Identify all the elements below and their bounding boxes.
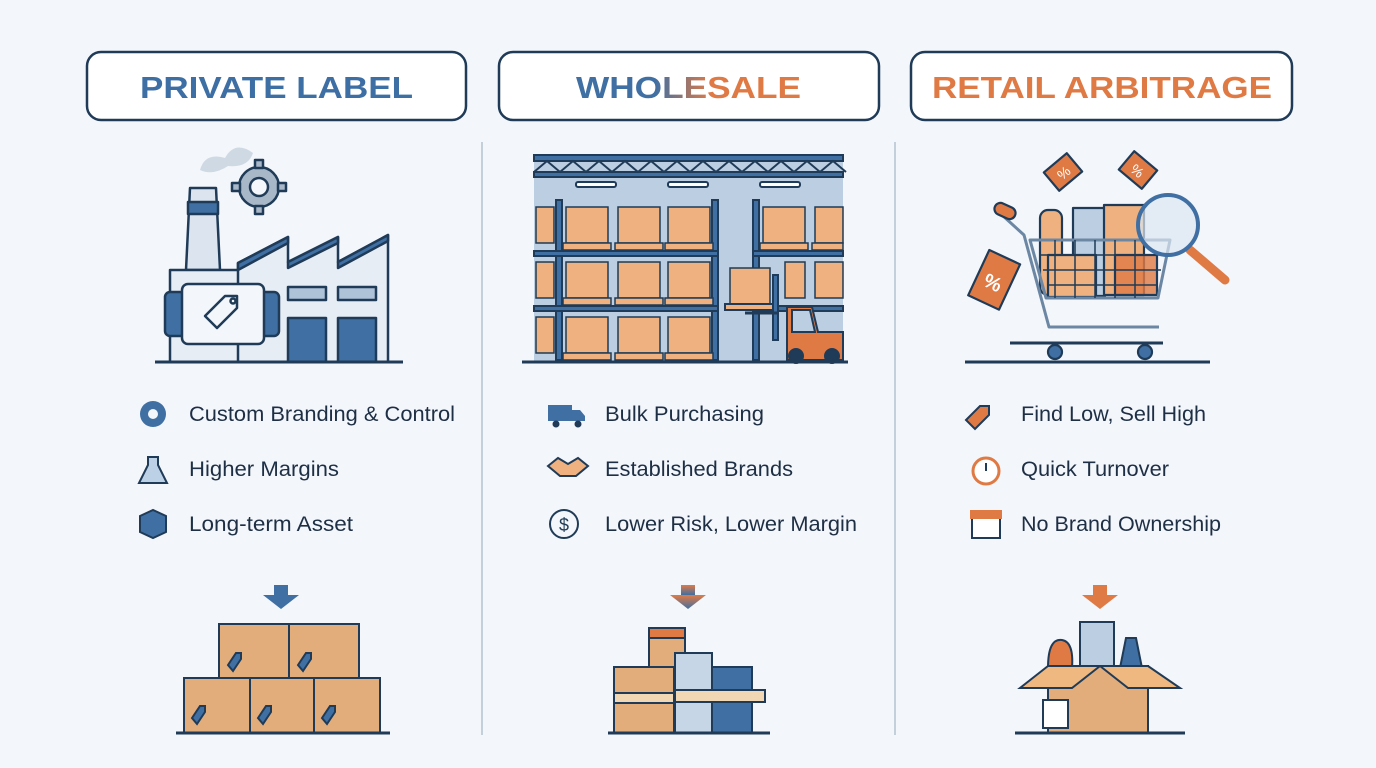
icon: stopwatch	[973, 458, 999, 484]
bullets: wholesale: Established Brands	[605, 458, 793, 481]
bullets: wholesale: Bulk Purchasing	[605, 403, 764, 426]
icon: dollar cycle	[550, 510, 578, 538]
icon: handshake	[548, 458, 588, 476]
header: wholesale	[499, 52, 879, 120]
bullets: private label: Custom Branding & Control	[189, 403, 455, 426]
bullets: retail arbitrage: No Brand Ownership	[1021, 513, 1221, 536]
bullets: private label: Long-term Asset	[189, 513, 353, 536]
box: open retail box	[1015, 622, 1185, 733]
bullets: private label	[139, 401, 455, 538]
header: wholesale: WHOLESALE	[576, 70, 801, 105]
icon: flask	[139, 457, 167, 483]
icon: tag	[966, 406, 989, 429]
icon: store	[970, 510, 1002, 538]
bullets: wholesale: Lower Risk, Lower Margin	[605, 513, 857, 536]
header: retail arbitrage: RETAIL ARBITRAGE	[932, 70, 1272, 105]
illustration: shopping cart: %	[1054, 163, 1074, 183]
header: private label	[87, 52, 466, 120]
header: retail arbitrage	[911, 52, 1292, 120]
arrow: private label	[263, 585, 299, 609]
boxes: wholesale stack	[608, 628, 770, 733]
icon: gear	[140, 401, 166, 427]
illustration: shopping cart	[965, 151, 1225, 362]
arrow: retail	[1082, 585, 1118, 609]
illustration: warehouse	[522, 155, 848, 363]
boxes: private label stack	[176, 624, 390, 733]
illustration: shopping cart: %	[980, 270, 1005, 297]
bullets: retail arbitrage: Find Low, Sell High	[1021, 403, 1206, 426]
bullets: private label: Higher Margins	[189, 458, 339, 481]
header: private label: PRIVATE LABEL	[140, 70, 413, 105]
illustration: factory	[155, 148, 403, 362]
icon: box	[140, 510, 166, 538]
icon: truck	[548, 405, 585, 428]
bullets: retail arbitrage	[966, 403, 1221, 538]
bullets: wholesale	[548, 403, 857, 538]
illustration: shopping cart: %	[1127, 161, 1147, 181]
bullets: retail arbitrage: Quick Turnover	[1021, 458, 1169, 481]
icon: dollar cycle: $	[559, 515, 569, 535]
arrow: wholesale	[670, 585, 706, 609]
